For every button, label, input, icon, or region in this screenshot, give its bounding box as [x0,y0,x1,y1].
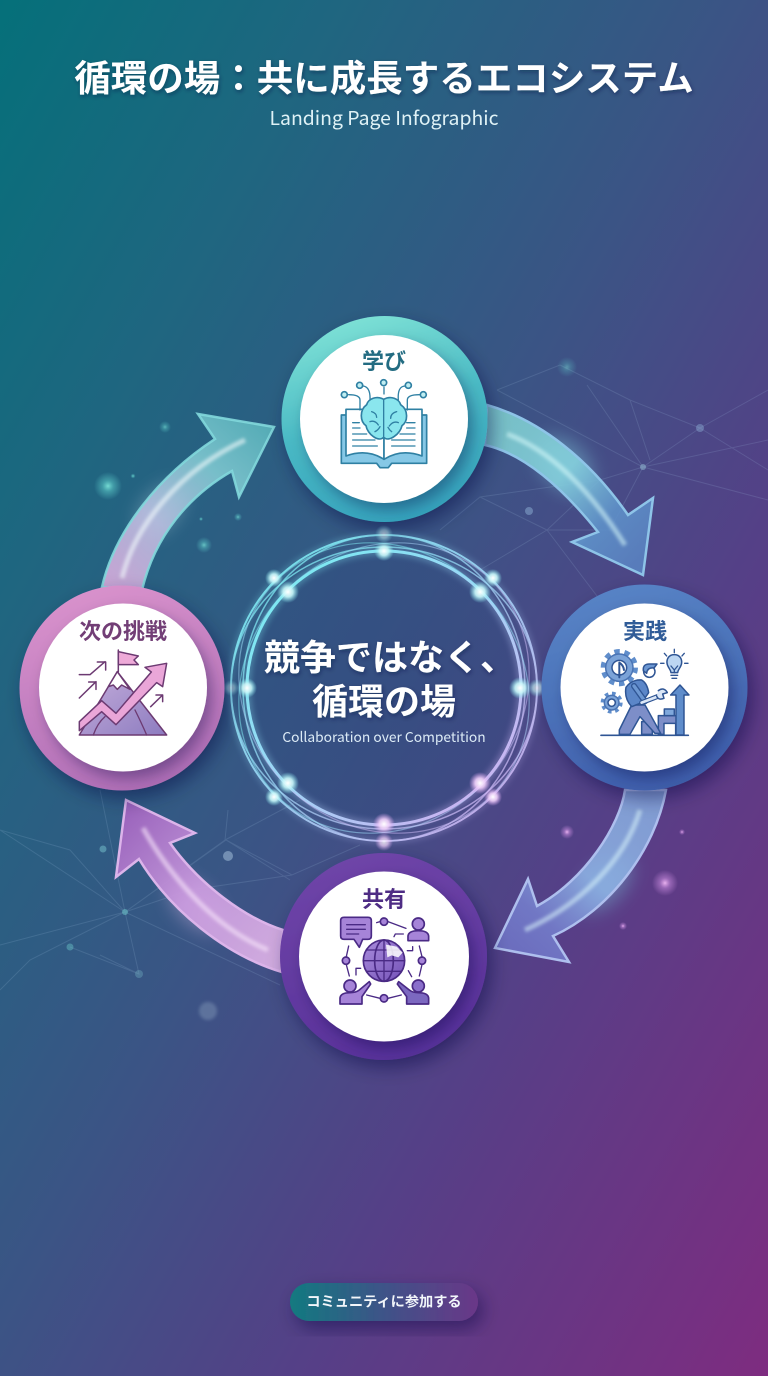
icon: worker with gears, bulb and rising bars [601,649,689,735]
label: practice: 実践 [623,614,667,646]
node: sharing (共有) [280,853,487,1060]
node: practice (実践) [542,584,748,790]
arrow: next challenge to learning [102,414,274,590]
center headline [264,629,516,725]
node: learning (学び) [282,316,488,522]
arrow: sharing to next challenge [116,800,283,972]
icon: mountain with flag and rising arrow [79,650,167,735]
arrow: practice to sharing [495,790,666,962]
center subtitle: Collaboration over Competition [282,726,486,746]
button: join community: コミュニティに参加する [306,1292,462,1312]
label: sharing: 共有 [362,882,406,914]
icon: globe with connected people [340,917,429,1004]
node: next challenge (次の挑戦) [20,586,224,790]
background network of lines and glowing particles [0,357,768,1020]
subtitle: Landing Page Infographic [270,102,499,131]
label: learning: 学び [362,344,406,376]
icon: open book with brain [341,380,427,468]
center ring: glowing network circle [179,483,589,893]
center headline: 循環の場 [312,673,456,725]
arrow: learning to practice [485,405,653,575]
button: join community [290,1283,478,1321]
center headline: 競争ではなく、 [264,629,516,681]
title: 循環の場：共に成長するエコシステム [74,49,694,102]
label: next challenge: 次の挑戦 [79,614,167,646]
